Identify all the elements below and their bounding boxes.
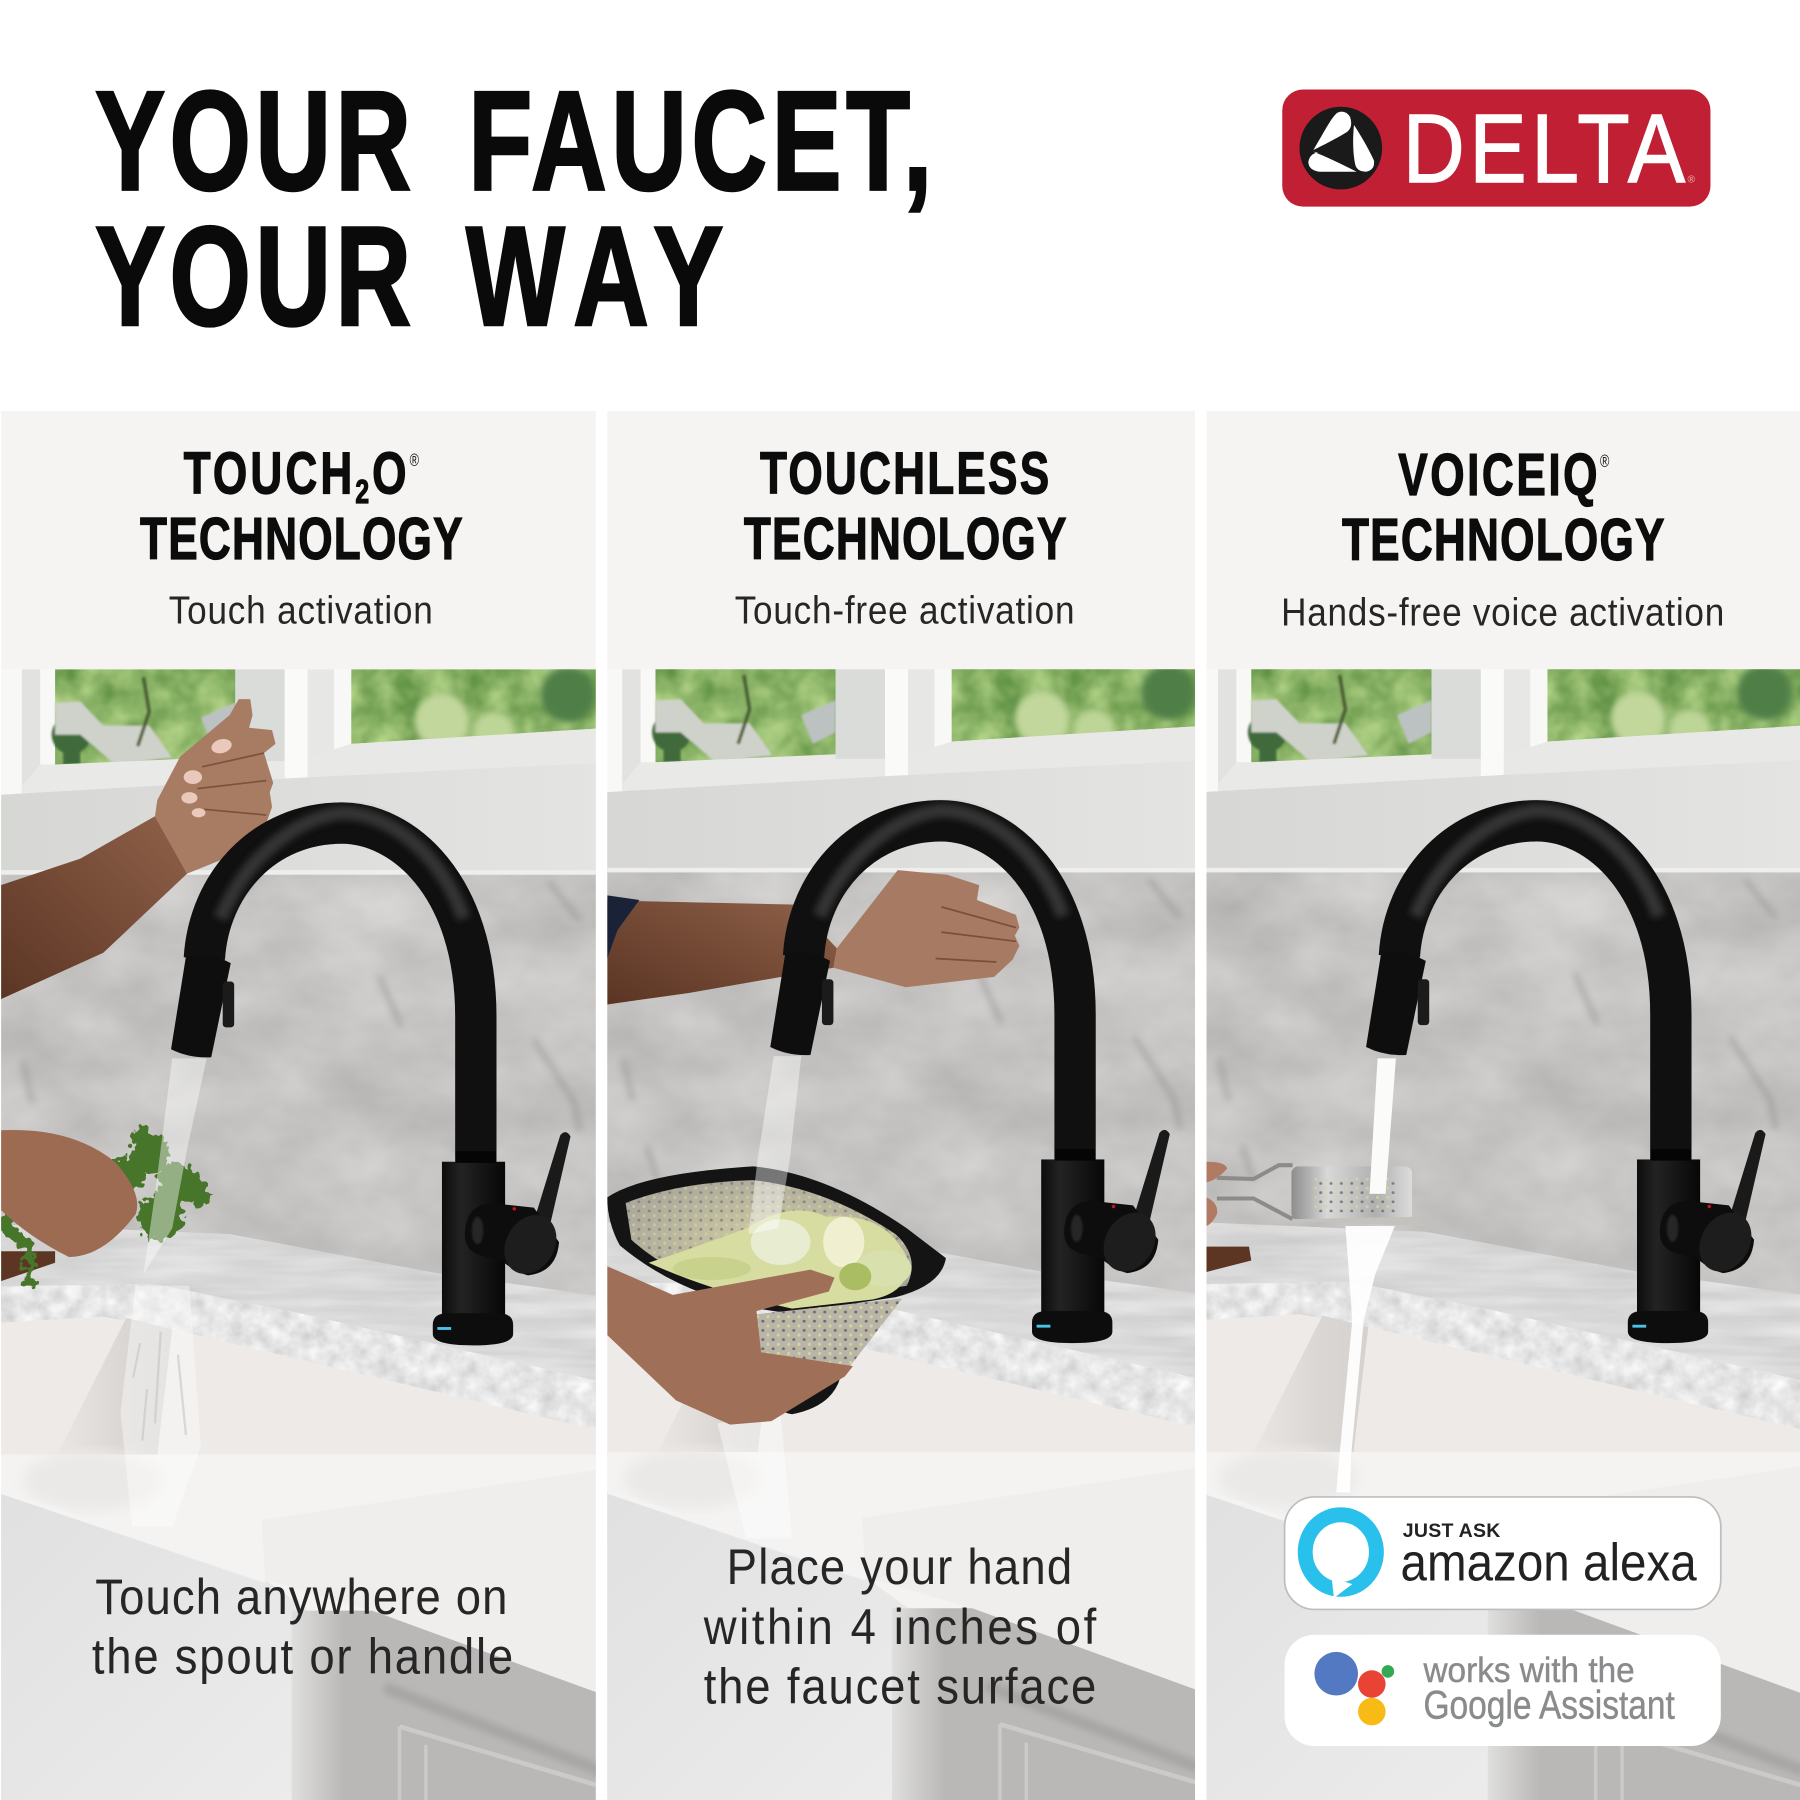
title: FAUCET,: [468, 63, 932, 220]
header: Touchless: [607, 411, 1195, 669]
header: Touchless: TECHNOLOGY: [744, 506, 1066, 573]
header: VoiceIQ: [1207, 411, 1800, 669]
herbs: [0, 1127, 210, 1288]
header: VoiceIQ: VOICEIQ: [1398, 441, 1597, 508]
header: Touch2O: TECHNOLOGY: [140, 506, 463, 573]
salad: [649, 1210, 908, 1309]
arm and hand on spout: [0, 699, 276, 1002]
lower hand: [0, 1130, 137, 1257]
badge: Amazon Alexa: JUST ASK: [1403, 1520, 1500, 1542]
logo: Delta: DELTA: [1403, 95, 1686, 203]
title: YOUR: [95, 63, 411, 220]
raised arm and hand: [607, 870, 1019, 1004]
colander: [607, 1166, 946, 1414]
badge: Google Assistant: works with the: [1423, 1650, 1635, 1690]
caption: within 4 inches of: [703, 1600, 1097, 1655]
grater and fingers: [1207, 1162, 1426, 1226]
header: VoiceIQ: ®: [1600, 452, 1609, 472]
caption: Place your hand: [727, 1540, 1072, 1596]
cutting board: [1207, 1247, 1251, 1272]
header: Touch2O: O: [372, 440, 407, 507]
caption: Touch anywhere on: [95, 1570, 507, 1626]
caption: the spout or handle: [92, 1630, 513, 1685]
caption: [703, 1540, 1097, 1715]
logo: Delta: ®: [1688, 175, 1696, 186]
header: Touch2O: [1, 411, 596, 669]
hand holding colander: [607, 1266, 853, 1425]
water stream: [1336, 1058, 1396, 1492]
cutting board: [0, 1251, 55, 1283]
icon: Alexa ring: [1305, 1515, 1376, 1598]
header: Touch2O: Touch activation: [169, 588, 433, 632]
title: WAY: [466, 199, 723, 356]
panel: Touchless technology: [587, 411, 1212, 1800]
badge: Google Assistant: Google Assistant: [1423, 1682, 1675, 1727]
photo: hand near faucet, colander under water: [587, 664, 1212, 1800]
header: VoiceIQ: Hands-free voice activation: [1281, 590, 1724, 634]
photo: hand touching faucet spout: [0, 666, 612, 1800]
caption: [92, 1570, 513, 1685]
header: VoiceIQ: TECHNOLOGY: [1342, 507, 1665, 574]
title: YOUR: [95, 199, 411, 356]
photo: faucet filling grater with water: [1182, 664, 1800, 1800]
caption: the faucet surface: [704, 1659, 1096, 1715]
badge: Amazon Alexa: amazon alexa: [1401, 1533, 1697, 1592]
water: [748, 1056, 801, 1234]
header: Touchless: TOUCHLESS: [760, 440, 1049, 507]
panel: Touch2O technology: [0, 411, 612, 1800]
header: Touch2O: ®: [410, 451, 419, 471]
header: Touchless: Touch-free activation: [735, 588, 1075, 632]
header: Touch2O: 2: [355, 473, 369, 511]
title: [95, 63, 932, 356]
water spray: [121, 1058, 207, 1527]
panel: VoiceIQ technology: [1182, 411, 1800, 1800]
badge: Amazon Alexa: [1285, 1497, 1721, 1609]
header: Touch2O: TOUCH: [184, 440, 352, 507]
logo: Delta: [1282, 90, 1710, 207]
badge: Google Assistant: [1285, 1635, 1721, 1746]
icon: Google dots: [1314, 1652, 1394, 1725]
